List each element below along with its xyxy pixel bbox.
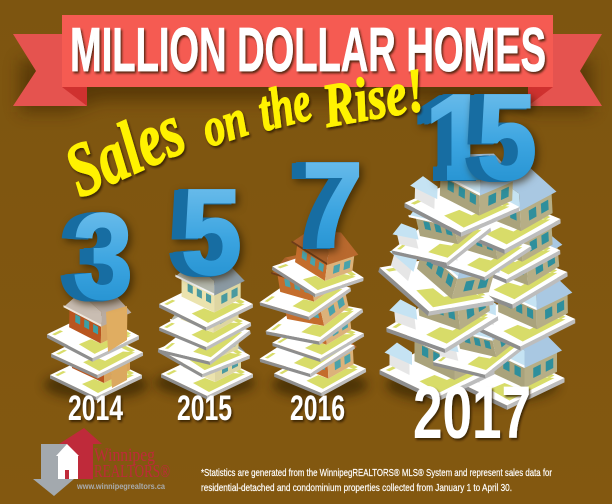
banner face <box>62 15 553 87</box>
number 5: 5 <box>181 164 242 300</box>
year label 2017: 2017 <box>413 371 531 454</box>
home unit 3 <box>151 289 255 375</box>
home unit 4 <box>157 281 252 353</box>
stack shadow <box>155 369 255 397</box>
icon: red up arrow <box>59 428 102 479</box>
digit 1: 1 <box>424 69 492 205</box>
left ribbon fold <box>62 87 87 106</box>
home unit 4 <box>256 268 368 356</box>
home unit 3 <box>268 294 366 367</box>
home unit 5 <box>159 260 253 331</box>
stack: 2016 homes <box>253 225 369 399</box>
right ribbon tail <box>528 34 602 106</box>
subtitle: Sales on the Rise!: on <box>194 88 255 158</box>
lower tower segment <box>110 355 127 388</box>
digit 5: 5 <box>477 69 537 205</box>
subtitle: Sales on the Rise! <box>53 56 430 214</box>
logo: Winnipeg REALTORS <box>33 428 170 496</box>
number 3: 3 <box>73 188 133 324</box>
home unit 12 <box>403 151 521 239</box>
stack shadow <box>44 370 148 400</box>
home unit 10 <box>443 167 562 257</box>
left ribbon tail <box>13 34 87 106</box>
subtitle: Sales on the Rise!: Sales <box>53 88 197 214</box>
home unit 9 <box>424 200 535 288</box>
stack shadow <box>386 365 558 405</box>
right ribbon fold <box>528 87 553 106</box>
subtitle: Sales on the Rise!: Rise! <box>317 56 430 141</box>
home unit 7 <box>447 200 562 286</box>
number 7: 7 <box>302 137 363 273</box>
year label 2016: 2016 <box>290 389 345 428</box>
subtitle: Sales on the Rise!: the <box>251 68 318 144</box>
stack: 2017 homes <box>370 151 576 410</box>
home unit 6 <box>269 225 369 303</box>
number 15 <box>416 92 542 190</box>
home unit 4 <box>464 269 576 352</box>
ribbon banner <box>13 15 602 106</box>
stack shadow <box>272 371 368 399</box>
upper tower segment <box>106 306 127 352</box>
home unit 11 <box>381 183 497 278</box>
home unit 3 <box>424 299 533 388</box>
icon: white house <box>56 444 79 479</box>
home unit 8 <box>370 215 510 332</box>
footnote <box>201 467 552 494</box>
icon: house door <box>65 470 69 479</box>
year label 2014: 2014 <box>68 389 123 428</box>
home unit 2 <box>254 304 358 384</box>
home unit 3 <box>47 290 140 363</box>
home unit 2 <box>51 330 143 379</box>
stack: 2015 homes <box>151 260 255 400</box>
year label 2015: 2015 <box>177 389 232 428</box>
home unit 2 <box>156 307 253 381</box>
logo wordmark REALTORS: REALTORS® <box>94 461 170 481</box>
stack: 2014 homes <box>44 290 148 400</box>
home unit 1 <box>272 327 367 399</box>
logo wordmark Winnipeg: Winnipeg <box>94 445 155 466</box>
icon: grey down arrow <box>33 444 74 496</box>
home unit 1 <box>50 333 142 400</box>
home unit 1 <box>161 332 253 400</box>
footnote: residential-detached and condominium properties collected from January 1 to April 30. <box>201 482 512 494</box>
home unit 6 <box>448 220 570 314</box>
home unit 1 <box>450 326 564 410</box>
home unit 5 <box>381 265 501 359</box>
home unit 5 <box>253 246 354 327</box>
logo url: www.winnipegrealtors.ca <box>76 481 165 491</box>
home unit 2 <box>380 318 494 402</box>
banner shadow <box>20 60 592 112</box>
